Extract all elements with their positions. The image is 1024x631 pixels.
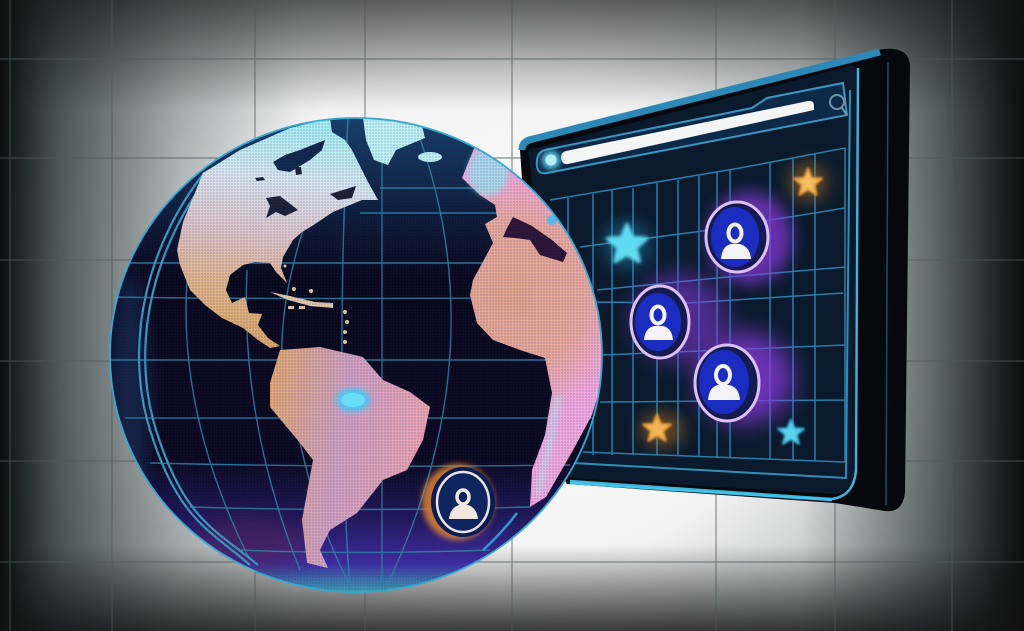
globe meridians and parallels (110, 118, 610, 590)
mediterranean (503, 217, 567, 262)
north atlantic cyan dot (547, 215, 557, 225)
user badge 1 (706, 202, 768, 272)
star: orange top (788, 162, 828, 202)
panel frame (520, 49, 910, 511)
caribbean islands (270, 264, 349, 344)
continent: europe and africa (462, 148, 602, 507)
continent: arctic and greenland (363, 118, 425, 165)
continent: north america (177, 118, 378, 348)
continent: south america (270, 347, 430, 568)
star: orange bottom (640, 412, 684, 448)
inner double rim (139, 172, 258, 565)
ocean (110, 118, 602, 592)
panel screen (528, 66, 858, 494)
search icon (830, 95, 847, 115)
arctic island (418, 152, 442, 162)
globe rim (110, 118, 602, 592)
hudson bay (273, 140, 325, 172)
user badge on globe (422, 464, 495, 540)
lock icon (542, 151, 560, 169)
great lakes (255, 167, 356, 218)
bright rim arc (483, 513, 517, 550)
neon glows (708, 192, 792, 284)
shading on left and lower edges (110, 270, 150, 530)
globe (110, 118, 625, 598)
screen grid (550, 148, 845, 462)
browser panel (520, 49, 910, 511)
panel bevel top (522, 52, 880, 150)
address bar (537, 83, 847, 173)
user badge 2 (631, 286, 689, 358)
africa lower cyan edge (538, 395, 558, 495)
star: small blue (778, 420, 804, 444)
glowing spot (336, 388, 370, 412)
europe cyan highlight (468, 148, 508, 196)
user badge 3 (695, 345, 759, 421)
star: blue (603, 221, 651, 269)
